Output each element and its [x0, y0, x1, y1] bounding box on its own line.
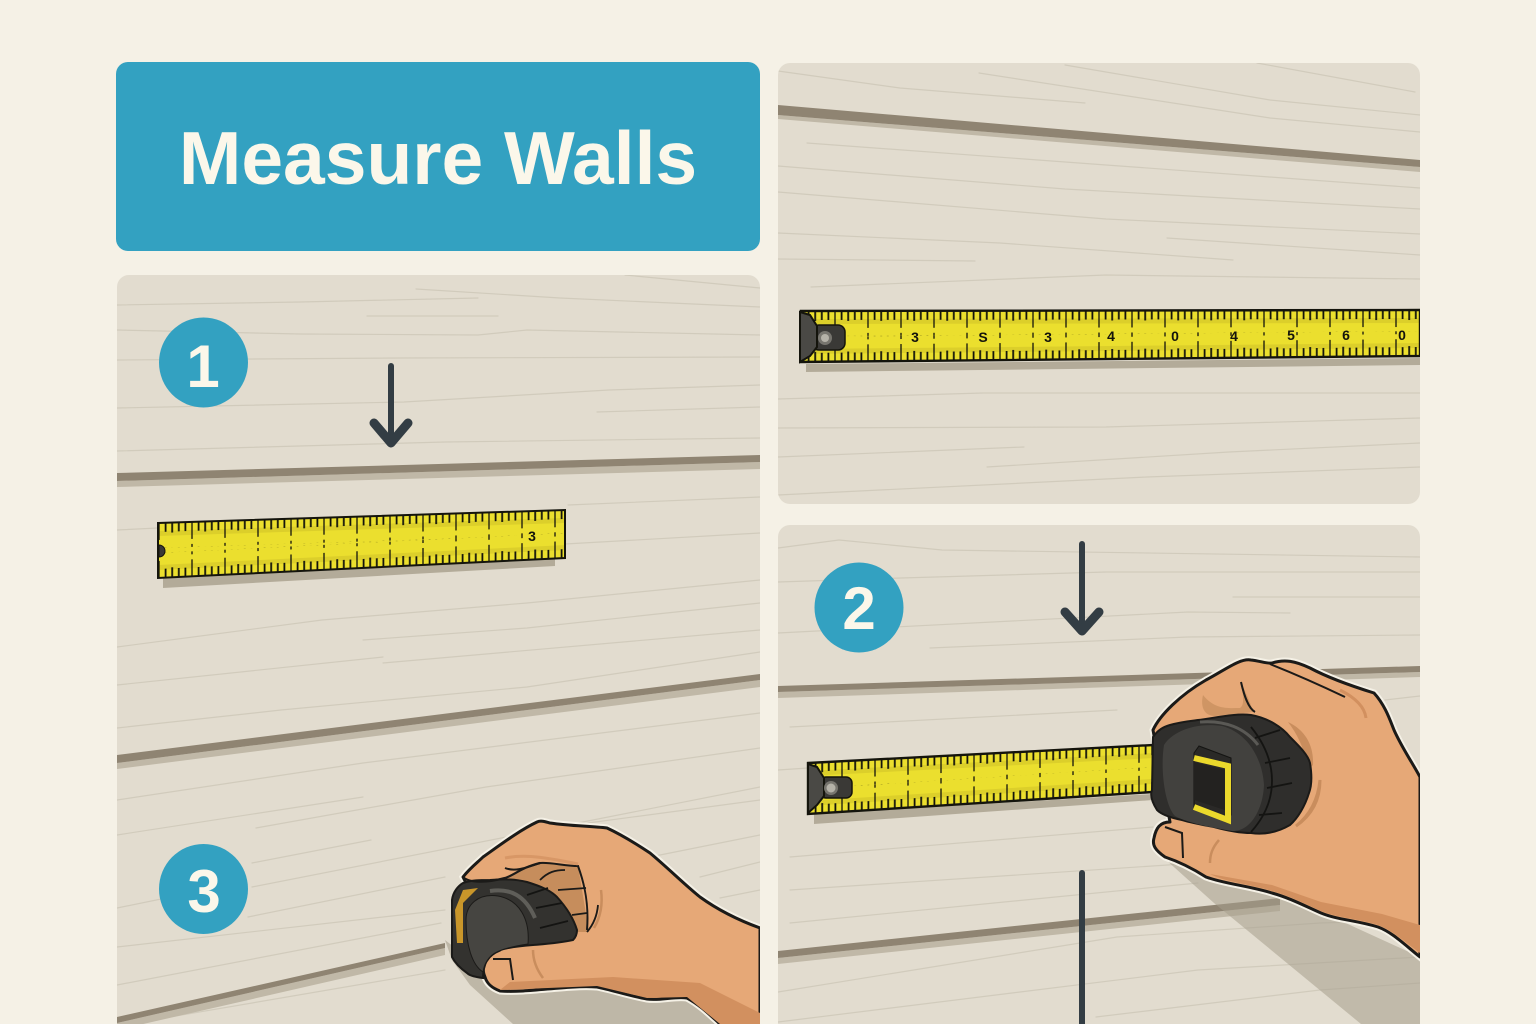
badge: step 3 — [159, 844, 248, 934]
hand gripping tape case: step 3 — [452, 821, 760, 1024]
title banner — [116, 62, 760, 251]
siding groove 2 — [778, 898, 1280, 964]
hand shading — [1210, 874, 1420, 953]
siding groove 3 — [117, 943, 445, 1024]
tape numbers: 5 — [1287, 327, 1295, 343]
case window — [1194, 746, 1231, 822]
hand holding tape case — [1151, 660, 1420, 957]
hand shading — [500, 977, 760, 1024]
tape numbers: 3 — [911, 329, 919, 345]
badge: step 2: 2 — [842, 575, 876, 642]
tape hook — [800, 312, 845, 362]
shadow under hand — [445, 940, 735, 1024]
badge: step 1 — [159, 318, 248, 408]
panel: step 1 and 3 wall — [117, 275, 760, 1024]
siding groove — [778, 105, 1420, 172]
arrow: step 2 — [1065, 544, 1099, 631]
tape numbers: 0 — [1398, 327, 1406, 343]
tape measure blade — [800, 310, 1420, 372]
thumb crease — [1210, 840, 1219, 863]
tape numbers: 3 — [1044, 329, 1052, 345]
thumb nail — [493, 959, 513, 980]
arrow shaft: lower — [1079, 873, 1085, 1024]
tape case — [452, 879, 577, 978]
index finger crease — [463, 863, 540, 882]
tape case — [1151, 715, 1311, 834]
tape numbers — [912, 330, 1406, 342]
title: Measure Walls — [179, 116, 697, 200]
siding groove 2 — [117, 674, 760, 769]
fingers behind case — [503, 856, 602, 932]
tape hook — [808, 764, 852, 813]
panel: step 2 wall — [778, 525, 1420, 1024]
thumb nail — [1165, 827, 1183, 858]
badge: step 2 — [814, 562, 904, 652]
badge: step 1: 1 — [186, 333, 220, 400]
shadow under hand — [1168, 862, 1420, 1024]
arrow: step 1 — [374, 366, 408, 443]
panel: upper right wall — [778, 63, 1420, 504]
tape numbers: 0 — [1171, 328, 1179, 344]
tape numbers: S — [978, 329, 988, 345]
siding groove 1 — [778, 666, 1420, 698]
tape numbers: 6 — [1342, 327, 1350, 343]
tape numbers: 4 — [1230, 328, 1238, 344]
tape measure blade — [808, 745, 1153, 824]
tape measure: step 1 blade — [158, 510, 565, 588]
siding groove 1 — [117, 455, 760, 487]
tape hole — [159, 545, 165, 557]
thumb crease — [533, 950, 543, 978]
badge: step 3: 3 — [187, 858, 221, 925]
tape number: 3 — [528, 528, 536, 544]
tape numbers: 4 — [1107, 328, 1115, 344]
